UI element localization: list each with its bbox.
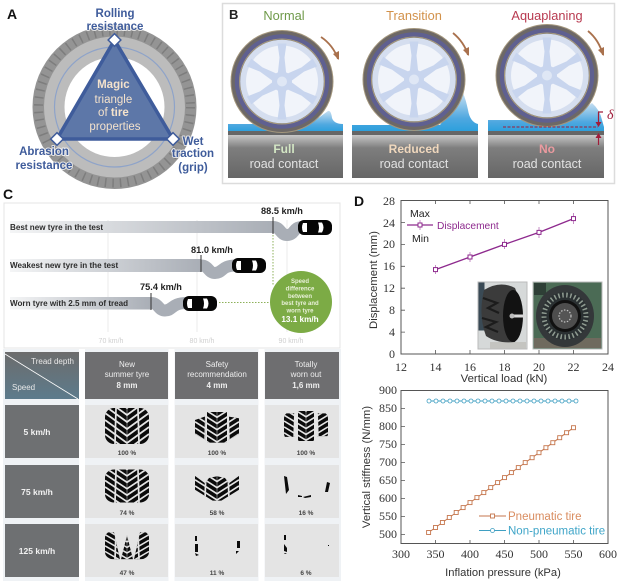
panel A: magic triangle — [7, 6, 214, 189]
column header: worn out — [265, 352, 339, 399]
x ticks: 24 — [602, 360, 614, 374]
triangle title: triangle — [95, 94, 132, 106]
speed grid: 70 km/h — [99, 338, 124, 345]
row: 75 km/h: 75 km/h — [21, 487, 53, 497]
row: 125 km/h: 125 km/h — [19, 546, 55, 556]
scene: transition — [352, 28, 478, 178]
x ticks: 600 — [599, 547, 617, 561]
series: pneumatic tire — [429, 428, 574, 532]
table background — [3, 349, 341, 581]
displacement series — [436, 213, 574, 274]
x ticks: 18 — [498, 360, 510, 374]
x ticks: 12 — [395, 360, 407, 374]
x axis title: Vertical load (kN) — [461, 373, 548, 385]
speed grid — [99, 220, 304, 345]
y ticks: 800 — [379, 419, 397, 433]
photo: non-pneumatic tire front view — [533, 282, 602, 349]
y ticks: 0 — [389, 347, 395, 361]
callout: speed difference: worn tyre — [285, 308, 314, 314]
gap dimension delta — [503, 108, 614, 145]
panel letter B: B — [229, 7, 238, 22]
row: weakest new tyre: 81.0 km/h — [191, 245, 233, 255]
gap dimension delta: δ — [607, 108, 614, 123]
magic triangle — [51, 34, 179, 145]
column header: worn out: 1,6 mm — [292, 381, 320, 390]
y axis title: Displacement (mm) — [368, 231, 380, 329]
corner header cell — [5, 352, 79, 399]
row: 125 km/h: 47 % — [120, 570, 135, 577]
y ticks: 20 — [383, 237, 395, 251]
line chart: displacement — [368, 194, 614, 385]
legend: Displacement — [437, 221, 499, 232]
dotted connector — [219, 235, 273, 302]
axes frame — [401, 390, 608, 544]
column header: new tyre: New — [119, 360, 135, 369]
legend — [479, 511, 605, 538]
axes frame — [401, 200, 608, 354]
panel frame — [222, 4, 614, 184]
column header: safety recommendation: recommendation — [187, 370, 247, 379]
column header: safety recommendation — [175, 352, 258, 399]
callout: speed difference: difference — [286, 286, 315, 292]
panel B: aquaplaning — [222, 4, 614, 184]
row: 5 km/h: 100 % — [208, 450, 226, 457]
speed grid: 80 km/h — [190, 338, 215, 345]
column gaps — [82, 349, 262, 581]
label: rolling resistance: Rolling — [96, 8, 134, 20]
y ticks: 750 — [379, 437, 397, 451]
label: rolling resistance: resistance — [87, 21, 143, 33]
y ticks: 600 — [379, 491, 397, 505]
row: 5 km/h: 5 km/h — [24, 427, 50, 437]
legend: Max — [410, 208, 431, 220]
x ticks: 350 — [426, 547, 444, 561]
x ticks: 20 — [533, 360, 545, 374]
y ticks: 28 — [383, 194, 395, 208]
heading: transition: Transition — [386, 8, 442, 23]
y ticks: 12 — [383, 281, 395, 295]
heading: normal: Normal — [263, 8, 305, 23]
row: 75 km/h — [5, 465, 339, 518]
label: abrasion resistance: resistance — [16, 160, 72, 172]
row: weakest new tyre: Weakest new tyre in the test — [10, 261, 119, 270]
icon: tire cross-section — [32, 25, 196, 189]
series: non-pneumatic tire — [429, 400, 576, 402]
row: worn tyre: Worn tyre with 2.5 mm of tread — [10, 299, 128, 308]
x ticks: 14 — [430, 360, 442, 374]
row: 75 km/h: 74 % — [120, 510, 135, 517]
scene: normal: road contact — [250, 157, 319, 171]
row: 125 km/h — [5, 524, 339, 577]
panel C: braking test and tread table — [3, 186, 341, 581]
corner header cell: Tread depth — [31, 357, 74, 366]
label: wet traction: (grip) — [178, 162, 208, 174]
y ticks: 700 — [379, 455, 397, 469]
scene: aquaplaning — [488, 24, 604, 178]
x ticks: 300 — [392, 547, 410, 561]
photo: tire side view — [478, 282, 527, 349]
callout: speed difference — [270, 271, 332, 333]
panel letter C: C — [3, 186, 13, 202]
legend: Pneumatic tire — [508, 511, 582, 523]
panel letter A: A — [7, 6, 17, 22]
column header: new tyre — [85, 352, 168, 399]
row: 75 km/h: 16 % — [299, 510, 314, 517]
column header: safety recommendation: 4 mm — [207, 381, 227, 390]
row: weakest new tyre — [10, 245, 266, 273]
y ticks: 900 — [379, 383, 397, 397]
y ticks: 550 — [379, 509, 397, 523]
legend: Non-pneumatic tire — [508, 526, 605, 538]
callout: speed difference: Speed — [291, 279, 309, 285]
y ticks: 8 — [389, 303, 395, 317]
y ticks: 16 — [383, 259, 395, 273]
scene: normal — [228, 30, 343, 178]
x ticks: 22 — [568, 360, 580, 374]
x ticks: 400 — [461, 547, 479, 561]
y axis title: Vertical stiffness (N/mm) — [361, 406, 373, 528]
scene: transition: Reduced — [389, 142, 439, 156]
x ticks: 500 — [530, 547, 548, 561]
panel letter D: D — [354, 193, 364, 209]
label: abrasion resistance: Abrasion — [19, 146, 69, 158]
scene: normal: Full — [273, 142, 295, 156]
y ticks: 650 — [379, 473, 397, 487]
panel D: non-pneumatic tire charts — [354, 193, 617, 579]
x ticks: 16 — [464, 360, 476, 374]
speed grid: 90 km/h — [279, 338, 304, 345]
y ticks: 500 — [379, 527, 397, 541]
label: wet traction: Wet — [183, 136, 203, 148]
row: 75 km/h: 58 % — [210, 510, 225, 517]
y ticks: 4 — [389, 325, 395, 339]
y ticks: 24 — [383, 216, 395, 230]
scene: transition: road contact — [380, 157, 449, 171]
x axis title: Inflation pressure (kPa) — [445, 567, 561, 579]
scene: aquaplaning: road contact — [513, 157, 582, 171]
row: 125 km/h: 11 % — [210, 570, 224, 577]
x ticks: 550 — [564, 547, 582, 561]
row: 5 km/h: 100 % — [297, 450, 315, 457]
heading: aquaplaning: Aquaplaning — [511, 8, 583, 23]
column header: worn out: Totally — [295, 360, 317, 369]
corner header cell: Speed — [12, 383, 35, 392]
row: 125 km/h: 6 % — [300, 570, 312, 577]
row: worn tyre — [10, 282, 217, 311]
callout: speed difference: best tyre and — [281, 301, 319, 307]
column header: safety recommendation: Safety — [206, 360, 228, 369]
braking frame — [4, 203, 340, 348]
tread table — [3, 349, 341, 581]
row: best new tyre: 88.5 km/h — [261, 206, 303, 216]
legend — [407, 208, 499, 245]
x ticks: 450 — [496, 547, 514, 561]
legend: Min — [412, 233, 429, 245]
triangle title: properties — [89, 121, 141, 133]
row: 5 km/h: 100 % — [118, 450, 136, 457]
row: best new tyre: Best new tyre in the test — [10, 223, 103, 232]
line chart: vertical stiffness — [361, 383, 617, 579]
triangle title: of tire — [98, 107, 129, 119]
scene: aquaplaning: No — [539, 142, 555, 156]
column header: new tyre: 8 mm — [117, 381, 137, 390]
row: 5 km/h — [5, 405, 339, 458]
triangle title: Magic — [97, 79, 130, 91]
callout: speed difference: between — [288, 294, 312, 300]
row: worn tyre: 75.4 km/h — [140, 282, 182, 292]
label: wet traction: traction — [172, 148, 214, 160]
y ticks: 850 — [379, 401, 397, 415]
row: best new tyre — [10, 206, 332, 235]
callout: speed difference: 13.1 km/h — [281, 315, 319, 324]
column header: worn out: worn out — [290, 370, 322, 379]
column header: new tyre: summer tyre — [105, 370, 150, 379]
